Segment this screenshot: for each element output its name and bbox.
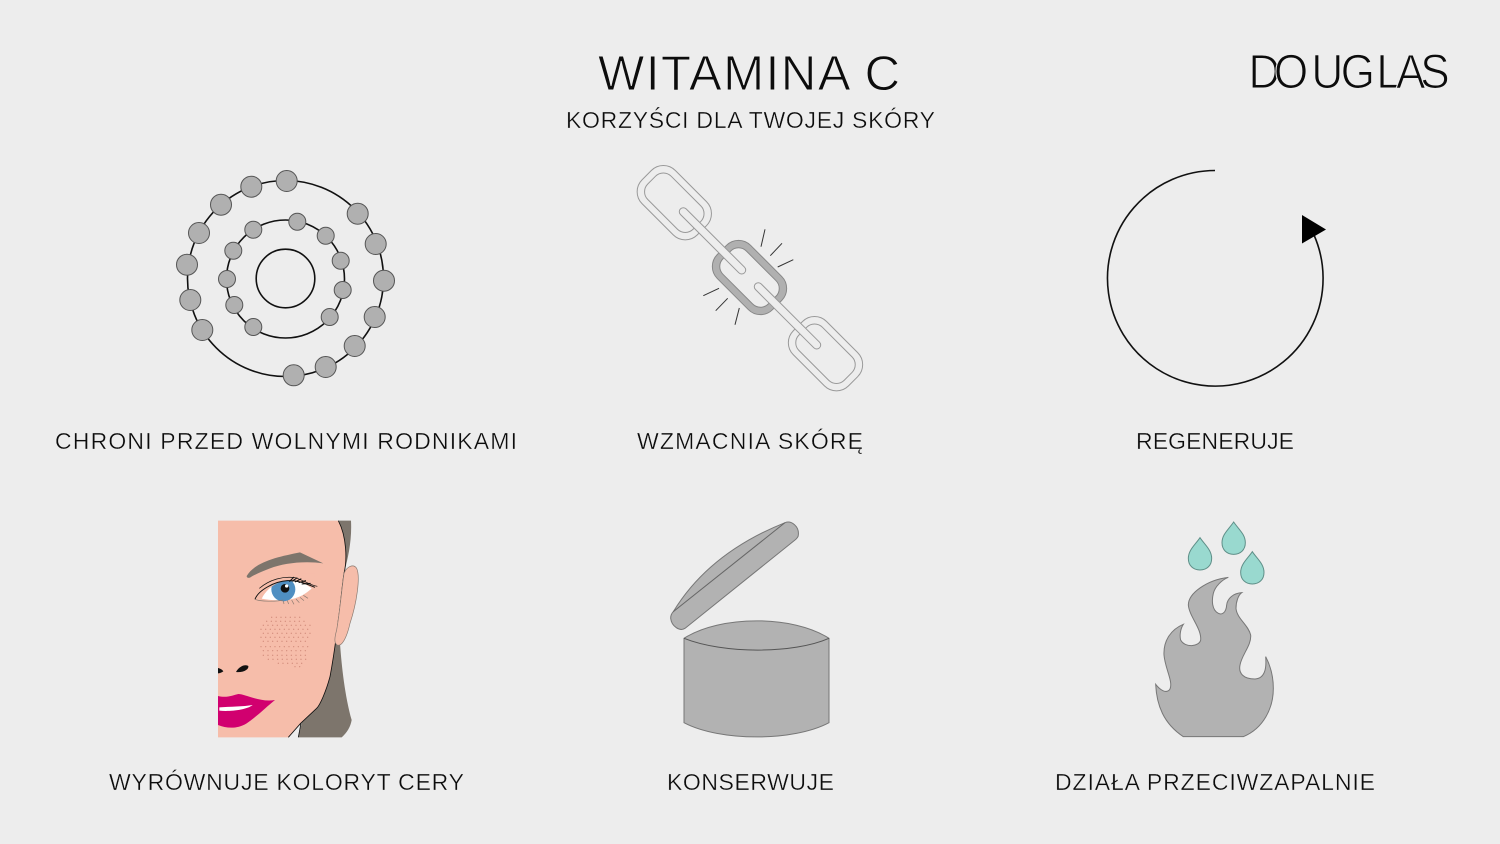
subtitle: KORZYŚCI DLA TWOJEJ SKÓRY [566,106,935,133]
icon: open jar [671,522,829,737]
label: WZMACNIA SKÓRĘ [637,428,863,454]
panel: regenerates [1107,170,1326,454]
title: WITAMINA C [598,47,900,101]
logo: Douglas: DOUGLAS [1248,44,1450,98]
panel: preserves [667,522,834,795]
label: WYRÓWNUJE KOLORYT CERY [109,769,464,795]
label: REGENERUJE [1136,428,1294,454]
icon: circular arrow [1107,170,1326,386]
label: DZIAŁA PRZECIWZAPALNIE [1055,769,1375,795]
panel: free radicals [55,170,517,454]
panel: anti-inflammatory [1055,522,1375,795]
icon: atom with orbiting particles [176,170,394,386]
panel: evens skin tone [109,521,464,795]
label: KONSERWUJE [667,769,834,795]
panel: strengthens skin [630,159,870,454]
icon: chain links [630,159,870,398]
icon: face [218,521,358,737]
label: CHRONI PRZED WOLNYMI RODNIKAMI [55,428,517,454]
icon: flame and drops [1156,522,1273,737]
